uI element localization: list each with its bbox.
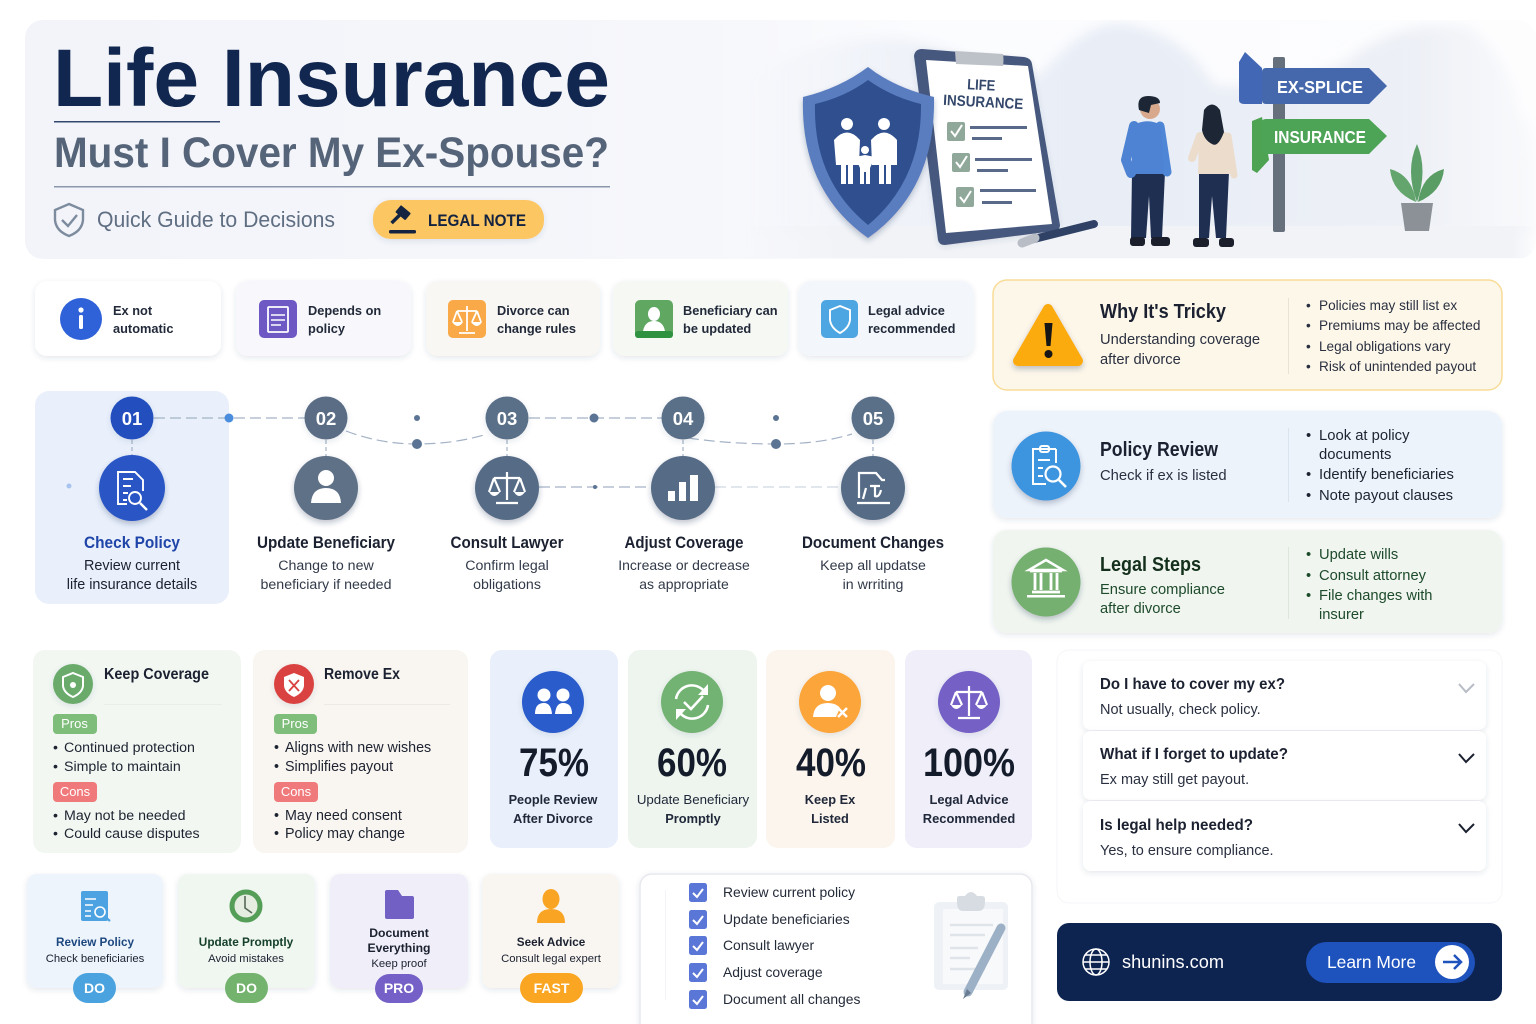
checklist items: Review current policy	[723, 884, 855, 900]
step 02	[257, 396, 396, 593]
header banner	[25, 20, 1536, 259]
icon: person	[537, 889, 565, 923]
bullet list: •	[1306, 298, 1311, 313]
illustration: clipboard: INSURANCE	[943, 92, 1024, 113]
step 04: Adjust Coverage	[624, 534, 744, 552]
stat: 40%: Listed	[811, 811, 849, 826]
feature card: divorce can change rules	[426, 281, 600, 356]
step 05: Keep all updatse	[820, 558, 926, 574]
bullet list: Premiums may be affected	[1319, 318, 1480, 333]
icon: refresh check	[661, 671, 723, 733]
panel: remove ex: •	[274, 759, 279, 775]
panel: keep coverage: Pros	[61, 716, 88, 731]
bullet list: Policies may still list ex	[1319, 298, 1457, 313]
badge: DO: DO	[84, 980, 105, 996]
illustration: pen	[1022, 224, 1094, 243]
step 01: life insurance details	[67, 577, 197, 593]
panel: checklist	[640, 874, 1032, 1024]
panel: keep coverage: Could cause disputes	[64, 826, 200, 842]
panel: legal steps: after divorce	[1100, 601, 1181, 617]
faq item 3: Is legal help needed?	[1100, 817, 1253, 834]
bullet list: •	[1306, 359, 1311, 374]
faq item 3	[1083, 801, 1486, 871]
icon: shield	[821, 300, 858, 338]
bullet list: •	[1306, 568, 1311, 584]
tip card: document everything: Document	[369, 926, 429, 940]
panel: legal steps	[993, 530, 1502, 633]
stat: 60%: Update Beneficiary	[637, 792, 750, 807]
panel: remove ex: Remove Ex	[324, 666, 400, 683]
step 05: Document Changes	[802, 534, 944, 552]
feature card: depends on policy: policy	[308, 321, 346, 336]
step 04: 04	[673, 408, 694, 429]
tip card: seek advice: Consult legal expert	[501, 953, 602, 965]
step 03: obligations	[473, 577, 541, 593]
icon: document search	[81, 891, 110, 921]
illustration: signpost: INSURANCE	[1274, 127, 1366, 147]
panel: keep coverage: May not be needed	[64, 808, 185, 824]
feature card: legal advice recommended: recommended	[868, 321, 955, 336]
bullet list: Look at policy	[1319, 428, 1410, 444]
icon: person	[635, 300, 673, 338]
stat: 60%: Promptly	[665, 811, 722, 826]
feature card: divorce can change rules: change rules	[497, 321, 576, 336]
cons tag	[53, 782, 97, 802]
icon: clipboard and pen	[934, 892, 1008, 999]
checklist items: Document all changes	[723, 991, 860, 1007]
panel: policy review: Policy Review	[1100, 439, 1218, 461]
stat: 75%: 75%	[519, 741, 589, 785]
legal note badge: LEGAL NOTE	[428, 212, 526, 230]
bullet list: •	[1306, 588, 1311, 604]
pros tag	[274, 714, 317, 734]
bullet list: Note payout clauses	[1319, 488, 1453, 504]
tip card: document everything	[330, 874, 468, 1003]
footer bar	[1057, 923, 1502, 1001]
panel: remove ex: •	[274, 826, 279, 842]
panel: keep coverage: •	[53, 740, 58, 756]
step 03	[450, 396, 564, 593]
feature card: legal advice recommended: Legal advice	[868, 303, 945, 318]
feature card: beneficiary can be updated: Beneficiary can	[683, 303, 778, 318]
cons tag	[274, 782, 318, 802]
panel: remove ex: Cons	[281, 784, 312, 799]
panel: keep coverage: Cons	[60, 784, 91, 799]
panel: remove ex: Policy may change	[285, 826, 405, 842]
feature card: ex not automatic: automatic	[113, 321, 173, 336]
step 02: beneficiary if needed	[261, 577, 391, 593]
bullet list: Risk of unintended payout	[1319, 359, 1476, 374]
icon: red shield	[274, 664, 314, 704]
panel: policy review: Check if ex is listed	[1100, 468, 1227, 484]
panel: why it's tricky	[993, 280, 1502, 390]
subtitle: Must I Cover My Ex-Spouse?	[54, 129, 609, 177]
feature card: legal advice recommended	[799, 281, 973, 356]
pros tag	[53, 714, 97, 734]
stat: 60%	[628, 650, 757, 848]
title underline	[54, 121, 220, 122]
step 05: in wrriting	[843, 577, 903, 593]
panel: why it's tricky: after divorce	[1100, 352, 1181, 368]
bullet list: •	[1306, 428, 1311, 444]
icon: gavel	[389, 205, 416, 234]
stat: 75%: After Divorce	[513, 812, 593, 826]
bullet list: •	[1306, 339, 1311, 354]
icon: green shield	[53, 664, 93, 704]
faq item 1: Not usually, check policy.	[1100, 702, 1261, 718]
icon: courthouse	[1012, 548, 1080, 616]
bullet list: Consult attorney	[1319, 568, 1427, 584]
faq item 2	[1083, 731, 1486, 800]
tip card: review policy: Review Policy	[56, 936, 134, 949]
panel: remove ex: May need consent	[285, 808, 402, 824]
badge: DO: DO	[236, 980, 257, 996]
learn more button: Learn More	[1327, 952, 1416, 972]
legal note badge	[373, 200, 544, 239]
feature card: depends on policy	[236, 281, 411, 356]
panel: why it's tricky: Why It's Tricky	[1100, 301, 1227, 323]
illustration: signpost	[1239, 52, 1387, 232]
bullet list: File changes with	[1319, 588, 1432, 604]
step 04: Increase or decrease	[618, 557, 750, 573]
tagline: Quick Guide to Decisions	[97, 207, 335, 232]
panel: remove ex: •	[274, 808, 279, 824]
illustration: clipboard: LIFE	[967, 76, 996, 95]
icon: shield check	[55, 204, 83, 236]
panel: keep coverage	[33, 650, 241, 853]
icon: clock	[232, 892, 260, 920]
panel: keep coverage: •	[53, 826, 58, 842]
sign labels: EX-SPLICE	[1277, 77, 1363, 97]
tip card: document everything: Everything	[368, 941, 430, 955]
stat: 40%: Keep Ex	[805, 792, 856, 807]
step timeline	[35, 391, 944, 604]
faq item 2: What if I forget to update?	[1100, 746, 1288, 763]
icon: warning	[1018, 309, 1078, 361]
title: Life Insurance	[53, 33, 610, 124]
step 03: Consult Lawyer	[450, 534, 564, 552]
bullet list: Identify beneficiaries	[1319, 467, 1454, 483]
bullet list: •	[1306, 547, 1311, 563]
illustration: clipboard	[914, 49, 1060, 245]
step 05	[802, 396, 944, 593]
faq item 1: Do I have to cover my ex?	[1100, 676, 1285, 693]
stat: 40%: 40%	[796, 741, 866, 785]
icon: info	[60, 298, 102, 340]
feature card: beneficiary can be updated	[613, 281, 788, 356]
panel: remove ex	[253, 650, 468, 853]
bullet list: insurer	[1319, 607, 1364, 623]
tip card: seek advice	[482, 874, 619, 1003]
step 1 highlight	[35, 391, 229, 604]
badge: PRO: PRO	[384, 980, 414, 996]
faq item 2: Ex may still get payout.	[1100, 772, 1249, 788]
step 02: 02	[316, 408, 336, 429]
stat: 100%: Legal Advice	[929, 792, 1009, 807]
step 03: Confirm legal	[465, 558, 549, 574]
panel: remove ex: •	[274, 740, 279, 756]
illustration: plant	[1390, 144, 1444, 231]
panel: faq	[1057, 650, 1502, 903]
tip card: seek advice: Seek Advice	[517, 936, 586, 949]
bullet list: Legal obligations vary	[1319, 339, 1451, 354]
panel: remove ex: Simplifies payout	[285, 759, 393, 775]
step 04: as appropriate	[639, 576, 729, 592]
step 01	[67, 396, 197, 593]
illustration: shield	[803, 67, 934, 238]
step 01: Check Policy	[84, 534, 181, 552]
icon: clipboard search	[1012, 432, 1080, 500]
tip card: review policy	[27, 874, 163, 1003]
step 01: 01	[122, 408, 142, 429]
stat: 100%: Recommended	[923, 811, 1015, 826]
panel: keep coverage: Keep Coverage	[104, 666, 209, 683]
feature card: ex not automatic: Ex not	[113, 303, 153, 318]
bullet list: •	[1306, 318, 1311, 333]
icon: document	[259, 300, 297, 338]
panel: policy review	[993, 411, 1502, 518]
tip card: update promptly: Update Promptly	[199, 935, 294, 949]
step 01: Review current	[84, 558, 180, 574]
panel: remove ex: Pros	[282, 716, 309, 731]
stat: 75%: People Review	[509, 793, 598, 807]
panel: why it's tricky: Understanding coverage	[1100, 332, 1260, 348]
stat: 40%	[766, 650, 895, 848]
stat: 60%: 60%	[657, 741, 727, 785]
tip card: review policy: Check beneficiaries	[46, 953, 145, 965]
tip card: update promptly	[178, 874, 315, 1003]
bullet list: documents	[1319, 447, 1391, 463]
subtitle divider	[54, 186, 610, 188]
icon: scales	[938, 671, 1000, 733]
stat: 75%	[490, 650, 618, 848]
faq item 3: Yes, to ensure compliance.	[1100, 843, 1274, 859]
panel: keep coverage: Continued protection	[64, 740, 195, 756]
feature card: beneficiary can be updated: be updated	[683, 321, 751, 336]
icon: scales	[448, 300, 486, 338]
connector nodes	[66, 414, 781, 489]
connector lines	[132, 418, 873, 487]
icon: person remove	[799, 671, 861, 733]
checklist items: Update beneficiaries	[723, 911, 850, 927]
step 03: 03	[497, 408, 517, 429]
icon: people	[522, 671, 584, 733]
tip card: document everything: Keep proof	[371, 958, 427, 970]
step 02: Change to new	[278, 558, 374, 574]
badge: FAST: FAST	[534, 980, 570, 996]
icon: folder	[385, 890, 414, 919]
feature card: ex not automatic	[35, 281, 221, 356]
bullet list: Update wills	[1319, 547, 1398, 563]
icon: family	[834, 118, 897, 184]
checklist items: Adjust coverage	[723, 964, 823, 980]
step 02: Update Beneficiary	[257, 534, 396, 552]
illustration: man	[1126, 96, 1170, 246]
step 05: 05	[863, 408, 883, 429]
learn more button	[1306, 942, 1475, 983]
checklist items	[689, 883, 860, 1009]
panel: keep coverage: •	[53, 808, 58, 824]
panel: keep coverage: Simple to maintain	[64, 759, 181, 775]
panel: remove ex: Aligns with new wishes	[285, 740, 431, 756]
feature card: divorce can change rules: Divorce can	[497, 303, 570, 318]
stat: 100%	[905, 650, 1032, 848]
bullet list: •	[1306, 488, 1311, 504]
illustration: woman	[1192, 104, 1234, 247]
stat: 100%: 100%	[923, 741, 1015, 785]
panel: legal steps: Ensure compliance	[1100, 582, 1225, 598]
step 04	[618, 396, 750, 592]
faq item 1	[1083, 661, 1486, 730]
bullet list: •	[1306, 467, 1311, 483]
checklist items: Consult lawyer	[723, 937, 814, 953]
tip card: update promptly: Avoid mistakes	[208, 953, 284, 965]
panel: keep coverage: •	[53, 759, 58, 775]
footer bar: shunins.com	[1122, 952, 1224, 972]
icon: globe	[1083, 949, 1109, 975]
panel: legal steps: Legal Steps	[1100, 554, 1201, 576]
feature card: depends on policy: Depends on	[308, 303, 381, 318]
